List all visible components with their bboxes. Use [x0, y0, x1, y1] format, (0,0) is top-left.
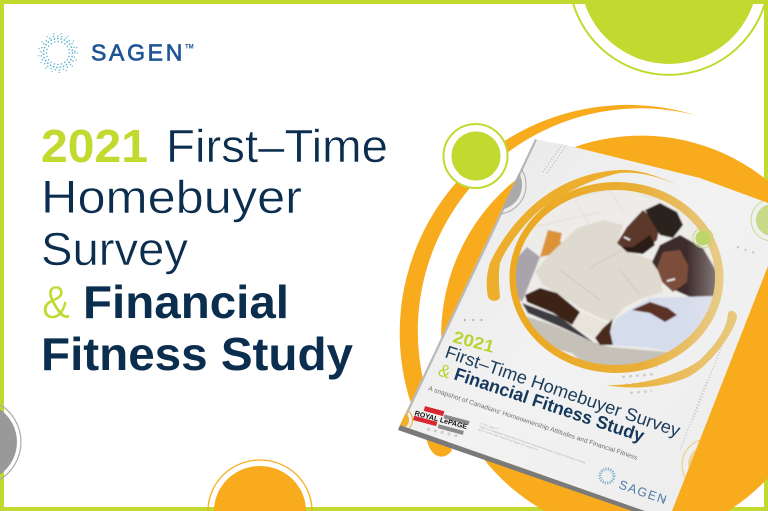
- orange crescent swoosh: [400, 105, 695, 457]
- brochure: [388, 139, 768, 511]
- logo: Sagen on brochure: SAGEN: [617, 478, 670, 507]
- title: Survey: [41, 223, 188, 275]
- swoosh: upper: [487, 170, 687, 301]
- title: Financial: [83, 276, 289, 328]
- icon: dotted ring: [38, 34, 78, 72]
- title: [41, 120, 388, 380]
- woman shirt and belly: [607, 296, 716, 353]
- hand on belly: [632, 302, 677, 322]
- brochure cover page: [400, 139, 768, 511]
- circle: lime accent: [444, 124, 508, 188]
- logo: Sagen: SAGEN: [91, 40, 185, 66]
- sofa: [526, 316, 667, 365]
- man forearm: [525, 288, 580, 325]
- ring around photo: [510, 182, 724, 373]
- title: Fitness Study: [41, 328, 353, 380]
- title: Homebuyer: [41, 171, 302, 223]
- circle: orange bottom: [208, 460, 312, 511]
- brochure subtitle: A snapshot of Canadians' Homeownership Attitudes and Financial Fitness: [427, 385, 639, 462]
- brochure title: Financial Fitness Study: [452, 364, 647, 446]
- small hand: [595, 319, 613, 345]
- laptop base: [522, 303, 593, 342]
- brochure fine print: © 2021 Sagen™: [480, 422, 499, 431]
- logo: Royal LePage: ROYAL LePAGE: [414, 410, 468, 431]
- laptop screen: [516, 246, 540, 302]
- brochure spine shadow: [400, 139, 537, 426]
- brochure page stack: [398, 425, 645, 511]
- photo: couple on sofa: [516, 190, 715, 365]
- orange pillow: [540, 230, 567, 257]
- man sweater: [535, 220, 663, 322]
- logo: Sagen on brochure: TM: [661, 497, 667, 503]
- brochure title: &: [436, 360, 453, 383]
- brochure fine print: Sagen is a registered trademark of Genworth Financial Mortgage Insurance Company Canada: [479, 425, 586, 465]
- large orange circle: [441, 136, 768, 511]
- brochure lime dot: [693, 228, 713, 248]
- title: &: [42, 276, 70, 328]
- brochure title: First–Time Homebuyer Survey: [443, 342, 683, 441]
- logo: Sagen: [38, 34, 194, 72]
- circle: grey bottom left: [0, 404, 21, 480]
- man head: [616, 203, 683, 254]
- photo fade right: [689, 242, 715, 307]
- title: First–Time: [166, 120, 388, 172]
- woman: [652, 235, 717, 297]
- brochure corner decorations: [388, 143, 768, 491]
- swoosh: lower right: [607, 311, 737, 388]
- brochure fine print: and is used under licence by Sagen MI Canada Inc.: [478, 428, 539, 452]
- circle: lime top right: [572, 0, 766, 75]
- logo: Sagen: TM: [185, 44, 194, 50]
- logo: Sagen on brochure: [600, 469, 670, 507]
- sweater cuff: [572, 312, 606, 338]
- title: 2021: [41, 120, 148, 172]
- logo: Royal LePage: [413, 404, 470, 436]
- brochure title: 2021: [451, 328, 496, 357]
